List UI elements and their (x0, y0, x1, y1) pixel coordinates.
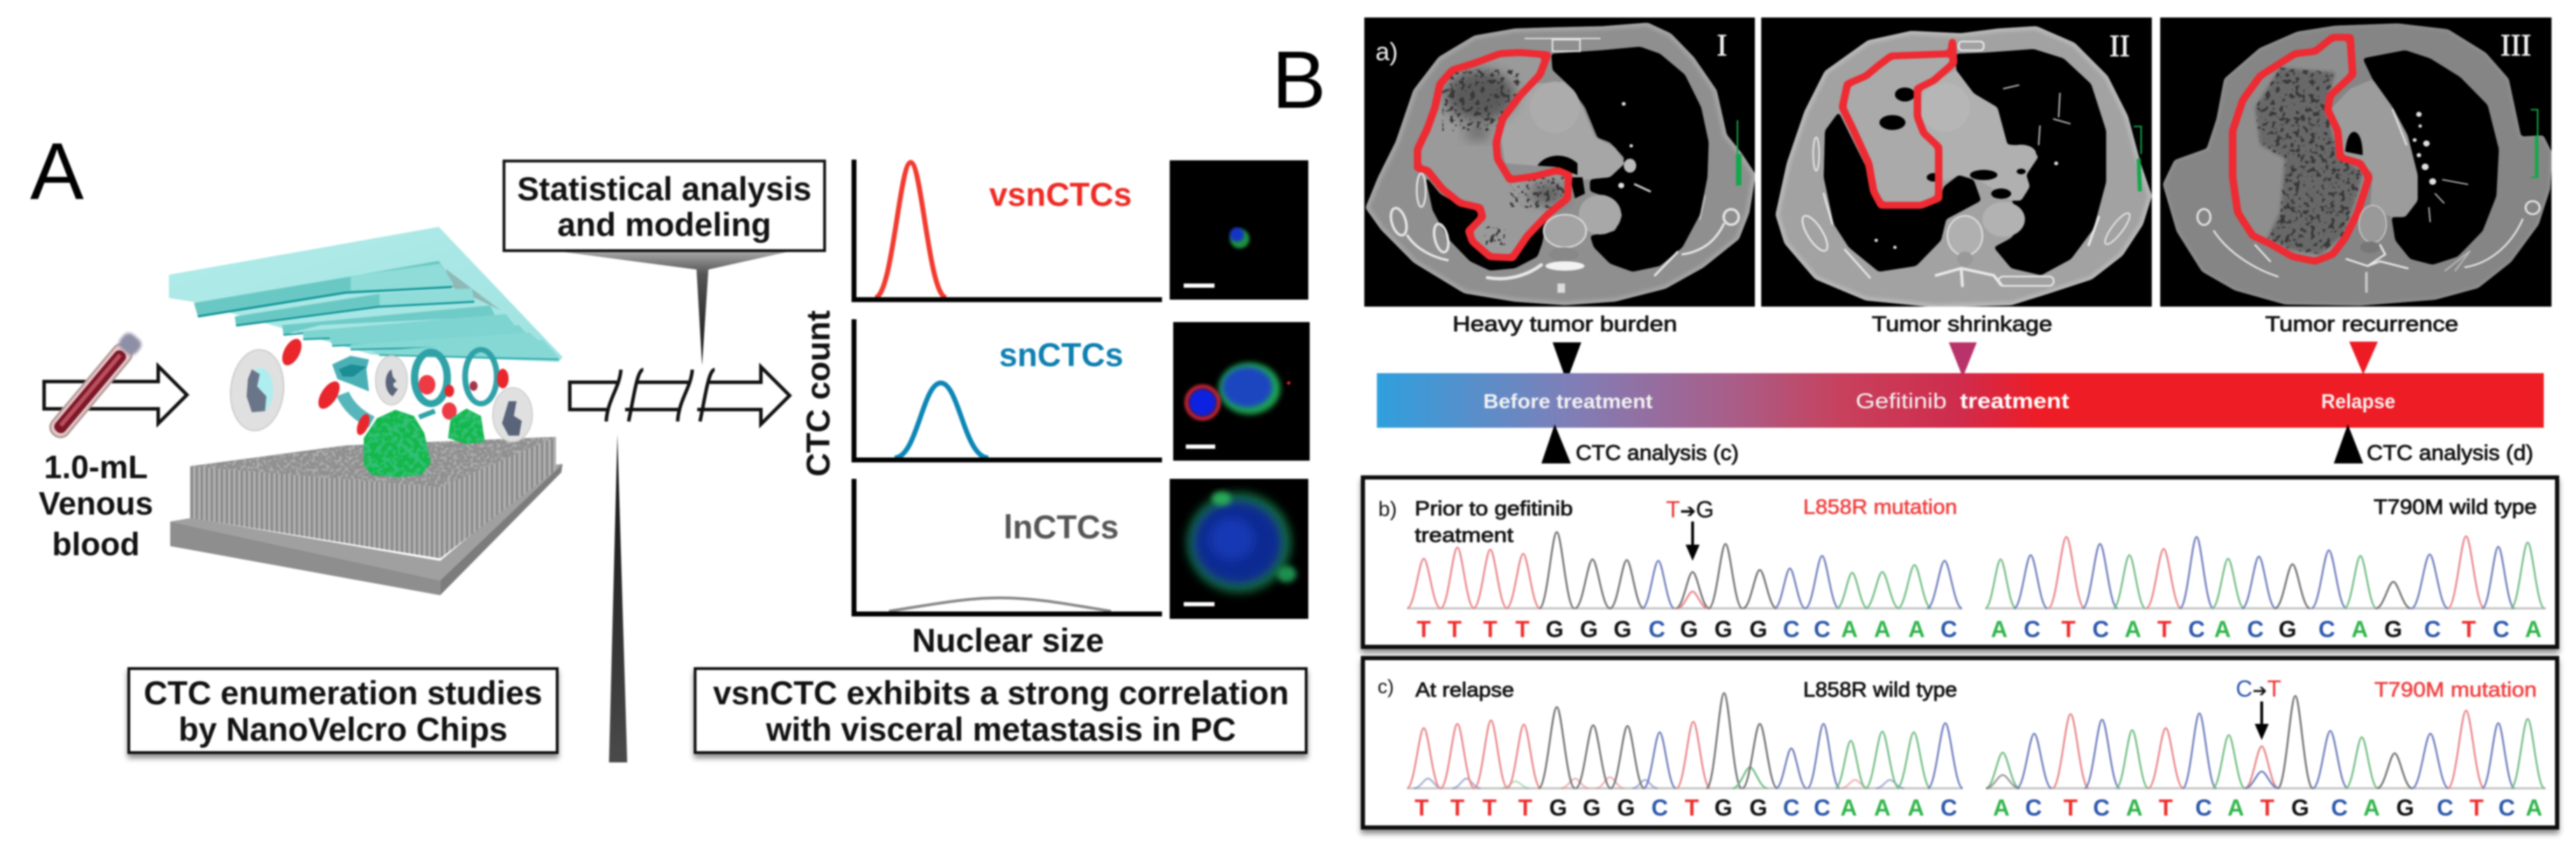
base calls: b: T (2462, 616, 2476, 642)
panel c: sequencing at relapse: At relapse (1415, 679, 1514, 701)
base calls: b: G (2384, 616, 2402, 642)
callout: statistical analysis (504, 161, 825, 365)
green tumor cells (358, 407, 487, 480)
base calls: c: C (1783, 795, 1800, 820)
treatment timeline bar: Relapse (2321, 391, 2395, 413)
base calls: b: A (2525, 616, 2542, 642)
base calls: c: C (2093, 795, 2110, 820)
panel A: CTC enumeration workflow (30, 127, 1310, 762)
base calls: c: T (2470, 795, 2484, 820)
panel B: CT and sequencing (1272, 18, 2557, 827)
nanovelcro top chip with teal channels (169, 227, 563, 362)
base calls: c: A (2227, 795, 2244, 820)
CT scan III (2160, 18, 2552, 307)
x axis label: Nuclear size (912, 622, 1104, 659)
base calls: c: A (1840, 795, 1857, 820)
text: CTC analysis c: CTC analysis (c) (1576, 440, 1739, 465)
base calls: c: A (1993, 795, 2010, 820)
panel b: sequencing before treatment: b) (1378, 498, 1397, 521)
white blood cells (227, 348, 532, 442)
chart: lnCTCs distribution (854, 479, 1162, 614)
panel c: sequencing at relapse (1363, 658, 2557, 827)
base calls: c: A (2126, 795, 2143, 820)
base calls: c: T (1483, 795, 1497, 820)
panel c: sequencing at relapse: c) (1378, 676, 1394, 697)
base calls: b: T (2062, 616, 2076, 642)
callout: statistical analysis: Statistical analysis (517, 170, 811, 207)
label: tumor recurrence: Tumor recurrence (2265, 312, 2458, 336)
base calls: c: G (1583, 795, 1601, 820)
text: blood volume: blood (52, 526, 140, 562)
panel b: sequencing before treatment: L858R mutation (1803, 496, 1957, 519)
panel b: sequencing before treatment: T➔G (1666, 496, 1714, 522)
base calls: c: T (1415, 795, 1429, 820)
marker: black triangle I (1553, 342, 1581, 382)
base calls: c: C (2498, 795, 2515, 820)
teal capture antibodies (332, 349, 497, 422)
chromatogram: c (1407, 693, 2544, 788)
treatment timeline bar: Gefitinib (1856, 389, 1947, 413)
nanovelcro chip substrate (170, 437, 563, 595)
chart: vsnCTCs distribution (854, 160, 1162, 300)
base calls: b: G (1546, 616, 1564, 642)
base calls: c: T (1450, 795, 1464, 820)
base calls: b: G (1614, 616, 1632, 642)
base calls: b: G (1749, 616, 1768, 642)
CT scan I (1364, 18, 1755, 307)
base calls: c: T (2159, 795, 2173, 820)
base calls: c: G (2291, 795, 2309, 820)
tall spike pointer (609, 434, 627, 762)
callout: CTC enumeration (129, 669, 557, 753)
CT label I: I (1717, 28, 1727, 62)
base calls: c: A (2363, 795, 2380, 820)
micrograph: vsnCTC (1170, 160, 1308, 300)
base calls: c: T (1518, 795, 1532, 820)
base calls: c: C (1940, 795, 1957, 820)
panel letter A: A (30, 127, 84, 216)
panel b: sequencing before treatment: Prior to gefitinib (1415, 498, 1573, 520)
panel b: sequencing before treatment (1363, 477, 2557, 647)
icon: blood tube (46, 330, 144, 441)
treatment timeline bar: treatment (1960, 389, 2069, 413)
marker: CTC analysis d triangle (2334, 424, 2363, 463)
callout: vsnCTC correlation (695, 669, 1306, 753)
panel c: sequencing at relapse: C➔T (2236, 676, 2281, 701)
panel b: sequencing before treatment: T790M wild type (2374, 496, 2537, 519)
base calls: c: T (1685, 795, 1699, 820)
text: a): a) (1376, 37, 1398, 66)
base calls: b: T (1483, 616, 1497, 642)
y axis label: CTC count (799, 310, 836, 477)
chromatogram: b (1407, 532, 2544, 608)
callout: vsnCTC correlation: with visceral metastasis in PC (765, 711, 1236, 748)
base calls: b: A (1991, 616, 2008, 642)
base calls: b: A (1908, 616, 1925, 642)
red blood cells (279, 336, 509, 437)
base calls: b: C (1940, 616, 1957, 642)
base calls: b: C (1648, 616, 1665, 642)
illustration: nanovelcro chip with cells (169, 227, 563, 595)
base calls: b: C (2318, 616, 2335, 642)
base calls: c: G (1714, 795, 1732, 820)
label: heavy tumor burden: Heavy tumor burden (1452, 312, 1677, 336)
base calls: b: A (1841, 616, 1858, 642)
micrograph: lnCTC (1170, 479, 1308, 619)
base calls: c: C (2437, 795, 2454, 820)
base calls: c: A (1907, 795, 1924, 820)
marker: magenta triangle II (1949, 342, 1977, 377)
base calls: c: G (1549, 795, 1567, 820)
base calls: c: C (1814, 795, 1830, 820)
CT label III: III (2500, 28, 2531, 62)
base calls: c: G (1617, 795, 1635, 820)
base calls: b: A (2214, 616, 2231, 642)
base calls: c: A (1874, 795, 1891, 820)
treatment timeline bar (1377, 373, 2544, 428)
base calls: b: T (1417, 616, 1431, 642)
callout: vsnCTC correlation: vsnCTC exhibits a strong correlation (713, 674, 1289, 711)
base calls: c: C (2195, 795, 2212, 820)
base calls: c: C (2331, 795, 2348, 820)
treatment timeline bar: Before treatment (1483, 391, 1653, 413)
base calls: c: G (1749, 795, 1768, 820)
arrow: broken arrow to charts (570, 367, 790, 424)
base calls: b: C (2024, 616, 2040, 642)
base calls: c: A (2526, 795, 2542, 820)
base calls: b: A (2351, 616, 2368, 642)
chart: vsnCTCs distribution: vsnCTCs (989, 176, 1132, 213)
base calls: b: T (2157, 616, 2171, 642)
base calls: b: G (1714, 616, 1732, 642)
micrograph: snCTC (1173, 322, 1310, 461)
chart: snCTCs distribution (854, 319, 1162, 460)
base calls: b: G (2278, 616, 2297, 642)
chart: snCTCs distribution: snCTCs (999, 336, 1124, 373)
base calls: c: C (2025, 795, 2042, 820)
base calls: c: C (1651, 795, 1668, 820)
base calls: c: T (2260, 795, 2274, 820)
base calls: b: C (1783, 616, 1800, 642)
text: blood volume (38, 449, 153, 562)
base calls: b: A (2124, 616, 2141, 642)
callout: CTC enumeration: CTC enumeration studies (144, 674, 542, 711)
base calls: b: G (1580, 616, 1598, 642)
panel b: sequencing before treatment: treatment (1415, 524, 1513, 547)
callout: CTC enumeration: by NanoVelcro Chips (178, 711, 507, 748)
base calls: c: T (2064, 795, 2078, 820)
panel letter B: B (1272, 34, 1326, 125)
base calls: b: C (2092, 616, 2109, 642)
CT label II: II (2109, 29, 2130, 63)
base calls: b: C (2188, 616, 2205, 642)
text: blood volume: 1.0-mL (44, 449, 148, 485)
base calls: b: G (1680, 616, 1698, 642)
base calls: b: A (1874, 616, 1891, 642)
panel c: sequencing at relapse: L858R wild type (1803, 678, 1957, 701)
callout: statistical analysis: and modeling (557, 206, 771, 243)
base calls: b: T (1448, 616, 1462, 642)
base calls: b: C (2247, 616, 2264, 642)
base calls: b: C (2424, 616, 2441, 642)
CT scan II (1761, 18, 2152, 307)
base calls: c: G (2396, 795, 2414, 820)
panel c: sequencing at relapse: T790M mutation (2374, 678, 2537, 701)
text: CTC analysis d: CTC analysis (d) (2367, 440, 2533, 465)
label: tumor shrinkage: Tumor shrinkage (1872, 312, 2052, 336)
base calls: b: T (1516, 616, 1530, 642)
arrow: blood input (44, 366, 187, 424)
chart: lnCTCs distribution: lnCTCs (1004, 508, 1119, 545)
text: blood volume: Venous (38, 485, 153, 522)
marker: CTC analysis c triangle (1541, 424, 1571, 463)
base calls: b: C (1814, 616, 1830, 642)
marker: red triangle III (2349, 342, 2378, 375)
base calls: b: C (2493, 616, 2510, 642)
